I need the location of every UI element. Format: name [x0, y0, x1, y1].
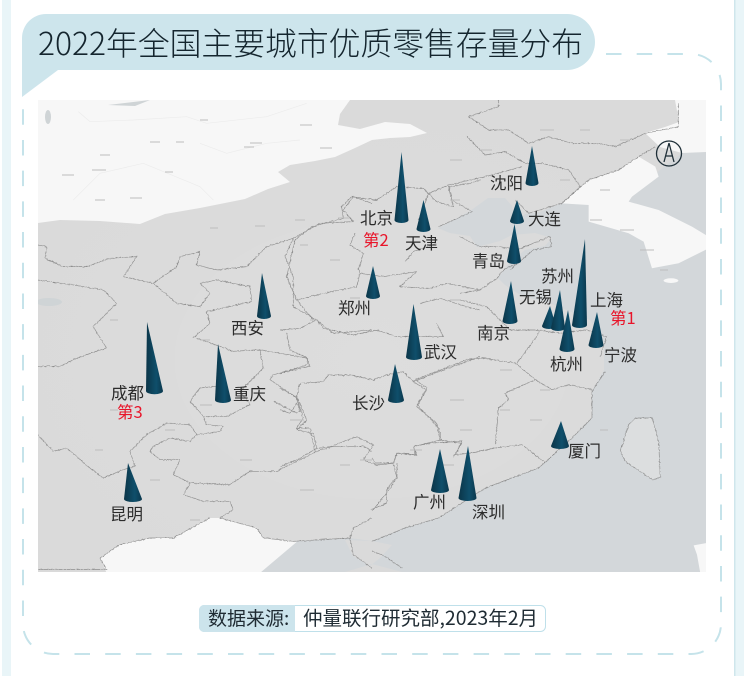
region: seas [442, 229, 553, 304]
label: 苏州: 苏州 [541, 263, 574, 287]
cone: 广州 [431, 449, 449, 493]
label: 青岛: 青岛 [472, 248, 505, 272]
rank: 第3: 第3 [117, 399, 143, 423]
cone: 北京 [394, 152, 408, 223]
label: 成都: 成都 [111, 380, 144, 404]
cone: 大连 [510, 200, 524, 224]
cone: 无锡 rear [542, 306, 556, 329]
region: corner land [620, 418, 707, 573]
cone: 青岛 [507, 224, 521, 264]
label: 郑州: 郑州 [338, 295, 371, 319]
label: 西安: 西安 [231, 315, 264, 339]
label: 广州: 广州 [413, 489, 446, 513]
cone: 成都 [146, 322, 163, 394]
label: 杭州: 杭州 [550, 351, 583, 375]
cone: 宁波 [588, 312, 604, 348]
region: Korean peninsula [562, 157, 709, 283]
cone: 深圳 [458, 446, 476, 501]
compass [656, 141, 682, 166]
cone: 南京 [502, 281, 518, 324]
source label: 数据来源: [208, 604, 289, 631]
region: Leizhou and Hainan [345, 540, 402, 572]
title banner [22, 14, 595, 97]
title: 2022年全国主要城市优质零售存量分布 [38, 19, 583, 65]
place-name marks [62, 120, 668, 520]
label: 南京: 南京 [477, 320, 510, 344]
cone: 重庆 [215, 344, 231, 403]
cone: 昆明 [124, 463, 142, 502]
label: 大连: 大连 [528, 206, 562, 230]
label: 武汉: 武汉 [424, 339, 458, 363]
rank: 第2: 第2 [363, 227, 389, 251]
label: 深圳: 深圳 [472, 499, 505, 523]
cone: 武汉 [406, 304, 422, 360]
label: 宁波: 宁波 [604, 342, 637, 366]
label: 沈阳: 沈阳 [490, 170, 523, 194]
Mongolia faint borders [73, 103, 307, 200]
rank: 第1: 第1 [610, 305, 636, 329]
label: 上海: 上海 [590, 287, 623, 311]
source text: 仲量联行研究部,2023年2月 [303, 602, 538, 631]
map of China [36, 100, 709, 573]
cone: 西安 [257, 273, 271, 319]
cone: 长沙 [388, 364, 404, 403]
label: 昆明: 昆明 [110, 501, 143, 525]
cone: 郑州 [366, 266, 380, 299]
source box [199, 602, 546, 632]
cone: 无锡 [551, 290, 565, 331]
label: 北京: 北京 [360, 205, 393, 229]
label: 重庆: 重庆 [233, 381, 266, 405]
label: 无锡: 无锡 [519, 284, 552, 308]
cone: 沈阳 [526, 146, 538, 186]
region: Southeast Asia [100, 518, 297, 573]
lakes [36, 100, 150, 306]
label: 天津: 天津 [405, 230, 438, 254]
cone: 杭州 [560, 310, 574, 352]
region: Mongolia [38, 100, 427, 224]
label: 厦门: 厦门 [568, 438, 601, 462]
region: Russia [645, 100, 706, 153]
label: 长沙: 长沙 [352, 390, 385, 414]
cone: 厦门 [551, 421, 569, 449]
cone: 上海 [572, 239, 587, 328]
cone: 天津 [416, 200, 430, 232]
province borders [37, 100, 679, 570]
